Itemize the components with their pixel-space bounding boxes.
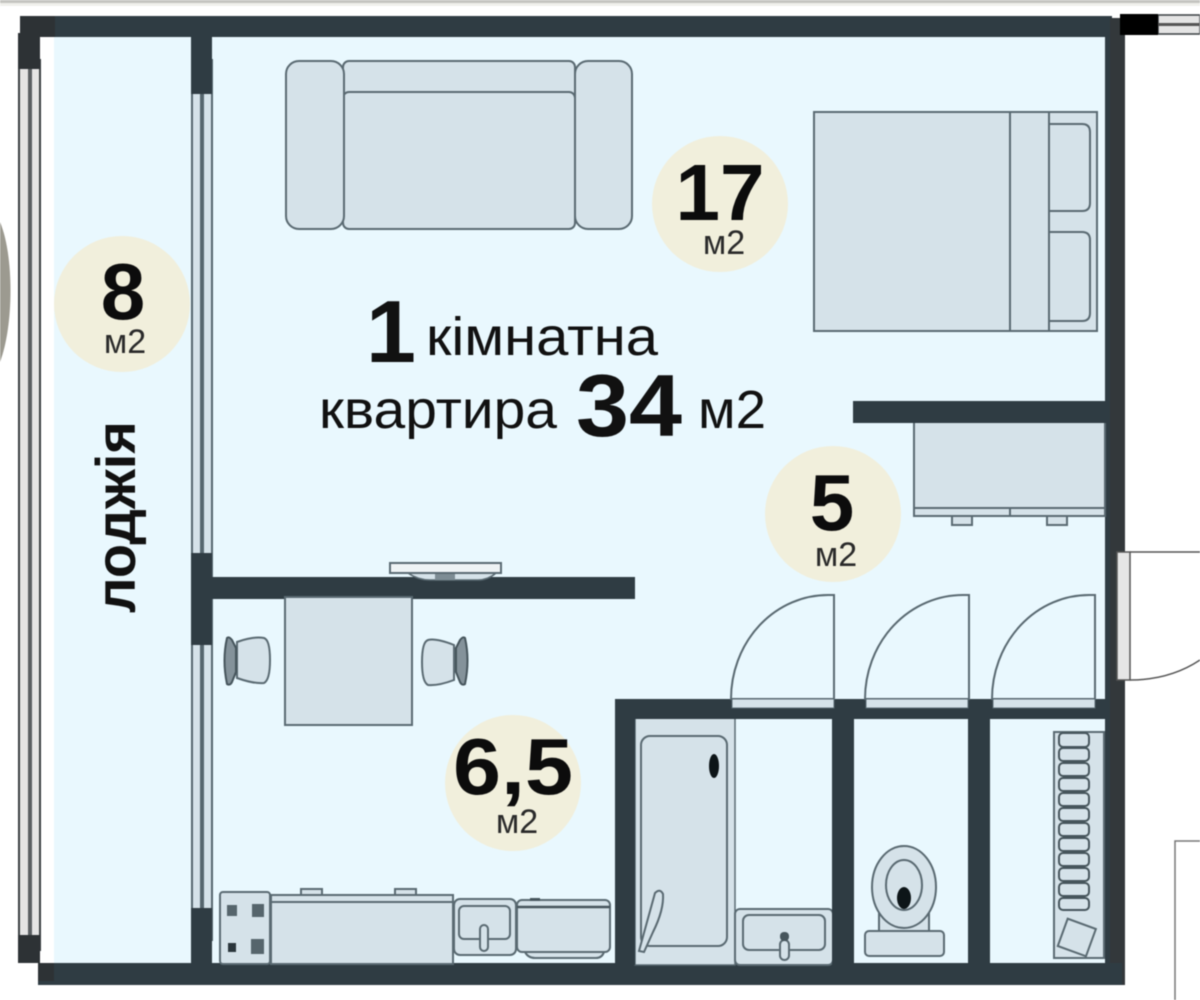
drying rack	[1054, 732, 1104, 958]
badge: hall 5 m2	[765, 446, 901, 582]
badge: room 17 m2: м2	[703, 224, 745, 262]
badge: loggia 8 m2: 8	[101, 247, 145, 336]
badge: room 17 m2	[652, 136, 788, 272]
title: apartment type and area	[319, 282, 766, 455]
badge: loggia 8 m2: м2	[104, 323, 146, 361]
badge: hall 5 m2: 5	[810, 458, 854, 547]
badge: loggia 8 m2	[54, 236, 190, 372]
door 1	[731, 595, 834, 708]
toilet	[865, 846, 944, 956]
bathroom sink	[735, 909, 833, 965]
interior window wall	[191, 33, 212, 964]
door 3	[992, 595, 1095, 708]
badge: kitchen 6,5 m2	[445, 715, 581, 851]
loggia label: лоджія	[84, 421, 147, 613]
bathroom walls	[615, 699, 1105, 965]
wardrobe	[914, 421, 1105, 525]
kitchen sink	[454, 899, 516, 955]
stove	[220, 892, 270, 964]
cooker hood	[390, 563, 501, 580]
neighbouring outline bottom right	[1175, 841, 1200, 1000]
bathtub	[635, 718, 735, 965]
counter	[271, 889, 453, 964]
badge: hall 5 m2: м2	[815, 536, 857, 574]
left loggia window	[18, 33, 40, 963]
left chair	[224, 637, 270, 685]
badge: kitchen 6,5 m2: м2	[496, 803, 538, 841]
badge: room 17 m2: 17	[676, 148, 764, 237]
badge: kitchen 6,5 m2: 6,5	[453, 722, 573, 811]
neighbouring shape at left edge	[0, 222, 10, 362]
wardrobe wall	[853, 401, 1107, 423]
sofa	[286, 61, 632, 229]
kitchen units	[220, 889, 610, 964]
fridge	[517, 898, 610, 958]
title: apartment type and area: м2	[698, 380, 766, 440]
right chair	[422, 637, 468, 685]
entrance door	[1117, 552, 1200, 680]
title: apartment type and area: 1	[366, 282, 416, 381]
title: apartment type and area: кімнатна	[426, 307, 659, 367]
door 2	[865, 595, 969, 708]
kitchen wall	[212, 577, 635, 599]
title: apartment type and area: квартира	[319, 380, 558, 440]
title: apartment type and area: 34	[576, 356, 682, 455]
bed	[814, 112, 1097, 331]
dining table	[285, 597, 412, 725]
top right window	[1120, 14, 1200, 35]
